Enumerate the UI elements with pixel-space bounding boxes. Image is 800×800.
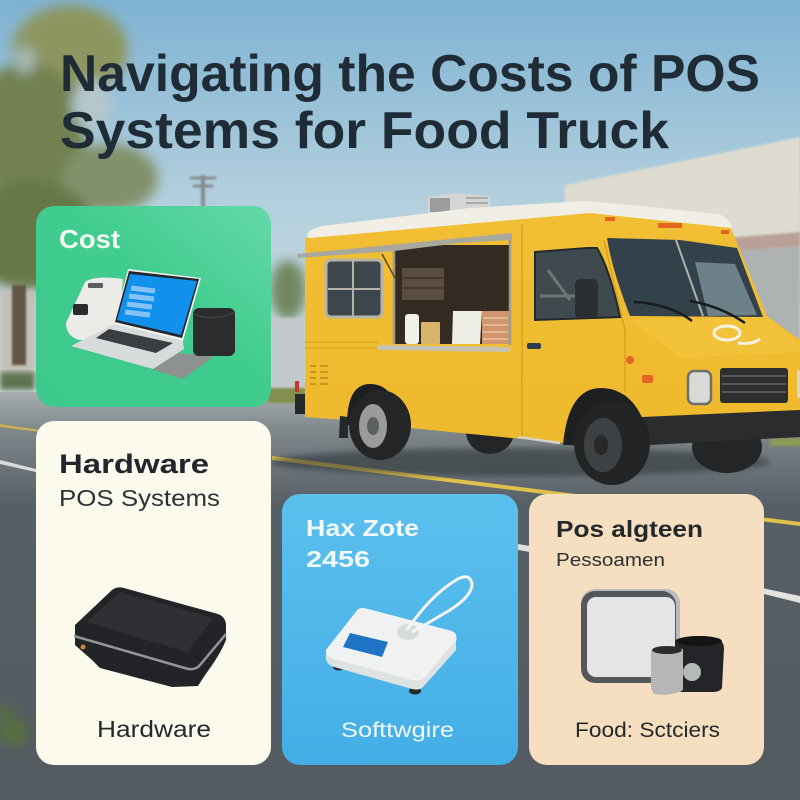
label: software: Softtwgire <box>341 719 454 742</box>
panel: software <box>282 494 518 765</box>
heading: pos algteen: Pos algteen <box>556 516 703 542</box>
subheading: POS systems: POS Systems <box>59 485 220 511</box>
cab lights <box>605 217 729 383</box>
terminal box <box>193 308 235 356</box>
title <box>60 45 760 160</box>
icon: laptop, printer and terminal <box>66 269 235 379</box>
printer <box>66 278 123 340</box>
awning <box>297 233 512 258</box>
food truck illustration <box>270 193 800 485</box>
panel: hardware <box>36 421 271 765</box>
rear wheel <box>349 390 411 460</box>
icon: black POS box <box>74 587 226 687</box>
number: 2456: 2456 <box>306 546 370 572</box>
title: Systems for Food Truck <box>60 102 669 160</box>
far front wheel <box>692 421 762 473</box>
truck body <box>305 212 800 445</box>
roof band <box>307 201 732 238</box>
mat <box>151 353 214 379</box>
serving window <box>377 236 510 352</box>
headlight <box>688 371 711 404</box>
icon: square terminal and cups <box>581 589 724 695</box>
wheel arches <box>347 384 645 447</box>
label: food sectors: Food: Sctciers <box>575 719 720 742</box>
front bumper <box>642 410 800 445</box>
grille <box>720 368 788 403</box>
front wheel <box>574 401 650 485</box>
heading: cost: Cost <box>59 224 120 254</box>
laptop base <box>71 324 184 369</box>
subheading: pessoamen: Pessoamen <box>556 550 665 570</box>
icon: white card reader <box>326 577 472 694</box>
cab door window <box>535 248 620 320</box>
panel: food sectors <box>529 494 764 765</box>
label: hardware: Hardware <box>97 716 211 742</box>
hidden rear wheel <box>466 410 514 454</box>
rear bumper and mudflap <box>295 394 348 438</box>
heading: hax zote: Hax Zote <box>306 515 419 541</box>
panel: cost <box>36 206 271 407</box>
heading: hardware: Hardware <box>59 449 209 479</box>
roof unit <box>428 193 490 215</box>
windshield <box>607 238 763 317</box>
laptop screen <box>114 269 201 341</box>
hood logo <box>714 326 760 344</box>
side window <box>326 260 382 317</box>
title: Navigating the Costs of POS <box>60 45 760 103</box>
panel vents <box>310 366 328 384</box>
